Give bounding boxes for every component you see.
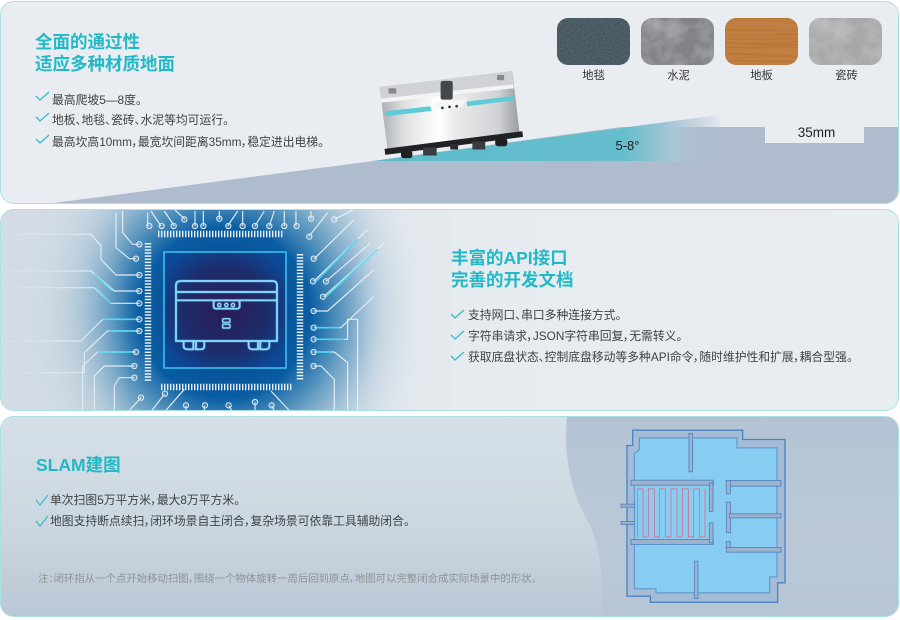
bullet text: 单次扫图5万平方米，最大8万平方米。 (50, 493, 240, 507)
bullet text: 最高坎高10mm，最宽坎间距离35mm，稳定进出电梯。 (52, 135, 324, 149)
footnote: 注：闭环指从一个点开始移动扫图，围绕一个物体旋转一周后回到原点，地图可以完整闭合成实际场景中的形状。 (38, 574, 537, 585)
label: cement: 水泥 (667, 70, 690, 82)
heading: 丰富的API接口 (451, 248, 568, 268)
panel: API interface (0, 209, 899, 411)
bullet text: 字符串请求，JSON字符串回复，无需转义。 (468, 329, 682, 343)
heading: 完善的开发文档 (451, 270, 574, 290)
label: tile: 瓷砖 (835, 70, 858, 82)
swatch: wood (725, 18, 798, 65)
bullet text: 获取底盘状态、控制底盘移动等多种API命令，随时维护性和扩展，耦合型强。 (468, 350, 853, 364)
panel: floor adaptability (0, 1, 899, 204)
step width label: 35mm (798, 125, 835, 140)
robot chassis on the ramp (380, 70, 524, 158)
floor ramp and step diagram (54, 116, 898, 203)
heading: SLAM建图 (36, 455, 121, 475)
check bullets (36, 494, 48, 527)
swatch: cement (641, 18, 714, 65)
heading (451, 248, 574, 290)
slope angle label: 5-8° (616, 138, 640, 153)
check bullets (36, 92, 50, 144)
pins (148, 234, 300, 387)
chip illustration (4, 210, 406, 410)
floor plan map (621, 430, 785, 602)
check bullets (450, 310, 464, 361)
swatch: carpet (557, 18, 630, 65)
panel: SLAM mapping (0, 416, 899, 617)
label: carpet: 地毯 (582, 70, 605, 82)
swatch: tile (809, 18, 882, 65)
bullet text: 地板、地毯、瓷砖、水泥等均可运行。 (52, 113, 229, 127)
heading: 全面的通过性 (35, 32, 140, 52)
robot outline icon (176, 281, 277, 349)
heading (35, 32, 175, 74)
label: wood: 地板 (750, 70, 773, 82)
background curve and floor plan (566, 417, 898, 603)
bullet text: 最高爬坡5—8度。 (52, 93, 142, 107)
bullet text: 地图支持断点续扫，闭环场景自主闭合，复杂场景可依靠工具辅助闭合。 (50, 514, 410, 528)
bullet text: 支持网口、串口多种连接方式。 (468, 308, 621, 322)
heading: 适应多种材质地面 (35, 54, 175, 74)
